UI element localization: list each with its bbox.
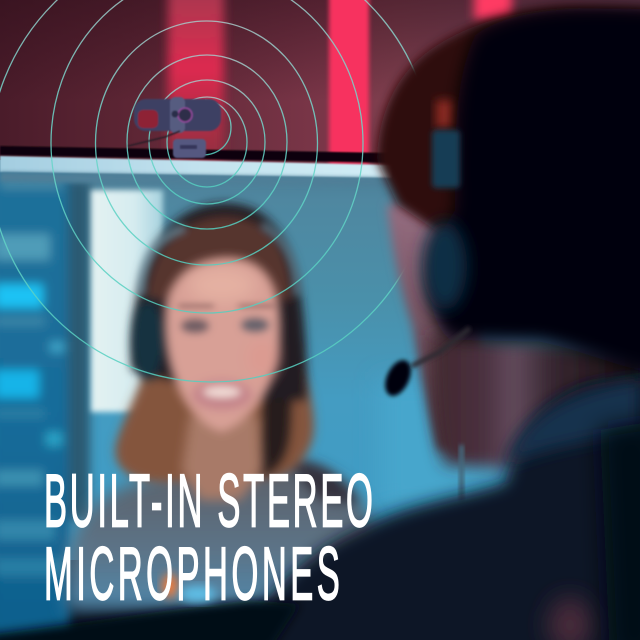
headset cable <box>459 445 464 500</box>
laptop foreground <box>0 574 300 640</box>
monitor white panel <box>91 190 163 412</box>
right shoulder shadow <box>285 461 360 505</box>
man: dark shirt <box>225 375 640 640</box>
man: headset <box>423 130 467 310</box>
man: microphone boom <box>380 328 470 400</box>
hair top <box>146 216 292 300</box>
man: head silhouette <box>430 8 640 375</box>
monitor screen <box>0 160 640 560</box>
monitor left sidebar with chat bars <box>0 172 90 640</box>
title <box>44 460 373 616</box>
face <box>165 258 280 432</box>
title: MICROPHONES <box>44 533 340 616</box>
mouth <box>192 380 252 410</box>
title: BUILT-IN STEREO <box>44 460 373 543</box>
man: face profile <box>387 190 480 450</box>
eyes <box>181 319 209 333</box>
shirt <box>66 466 392 610</box>
monitor bezel and top highlight <box>0 146 395 186</box>
man: hair <box>377 8 640 240</box>
headset band highlight <box>141 228 185 295</box>
neck <box>182 415 262 500</box>
sound wave rings <box>0 0 433 382</box>
headset back and ear cups <box>132 203 306 400</box>
hair lower <box>115 340 314 483</box>
woman on screen <box>66 203 392 610</box>
background: maroon wall with pink light bars <box>0 0 640 170</box>
man: neck <box>430 335 640 470</box>
brows <box>178 304 214 308</box>
webcam <box>128 97 221 158</box>
